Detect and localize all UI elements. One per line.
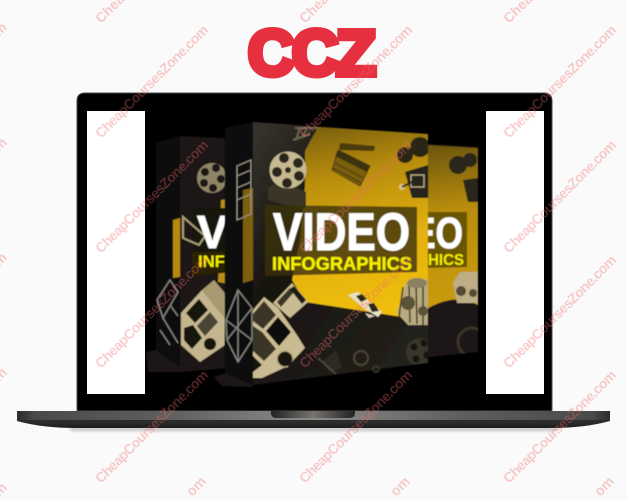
watermark: CheapCoursesZone.com (500, 367, 619, 486)
white screen panel left (87, 111, 145, 394)
product box: back left: V (197, 206, 228, 258)
trackpad notch (271, 411, 355, 418)
laptop base (17, 411, 610, 431)
product box: back right: HICS (428, 252, 464, 269)
product box: back left (146, 136, 262, 372)
film strip top (293, 128, 318, 140)
watermark: CheapCoursesZone.com (500, 252, 619, 371)
watermark: CheapCoursesZone.com (92, 22, 211, 141)
logo: CCZ: C (248, 17, 294, 89)
watermark: CheapCoursesZone.com (296, 252, 415, 371)
product box: back right (427, 143, 479, 358)
white screen panel right (486, 111, 544, 394)
box front face (253, 122, 428, 385)
icon: film projector (397, 137, 430, 198)
icon: reel bottom right (406, 338, 428, 365)
logo: CCZ: C (292, 17, 338, 89)
watermark: CheapCoursesZone.com (92, 367, 211, 486)
title: VIDEO: VIDEO (273, 203, 410, 262)
side lattice (157, 280, 178, 345)
subtitle: INFOGRAPHICS: INFOGRAPHICS (272, 254, 412, 274)
watermark: CheapCoursesZone.com (296, 22, 415, 141)
icon: clapperboard (332, 143, 375, 186)
watermark: CheapCoursesZone.com (92, 252, 211, 371)
product box: main (214, 122, 434, 387)
side clapper (237, 160, 251, 220)
icon: reel (456, 326, 478, 354)
product box: back right: EO (412, 209, 463, 258)
laptop lid (77, 93, 552, 411)
title band (265, 205, 417, 276)
watermark: CheapCoursesZone.com (296, 137, 415, 256)
watermark: om (387, 473, 413, 499)
watermark: CheapCoursesZone.com (92, 137, 211, 256)
logo: CCZ (248, 17, 376, 89)
icon: film scraps on dark area (318, 350, 379, 374)
popcorn (453, 272, 478, 303)
watermark: CheapCoursesZone.com (296, 367, 415, 486)
watermark: om (591, 473, 617, 499)
box side face (214, 122, 253, 387)
icon: film reel (268, 152, 306, 208)
watermark: CheapCoursesZone.com (500, 22, 619, 141)
logo: CCZ: Z (336, 17, 376, 89)
product box: back left: INF (198, 252, 225, 271)
watermark: CheapCoursesZone.com (500, 137, 619, 256)
icon: vintage camera (252, 282, 309, 379)
icon: ticket (348, 292, 382, 318)
watermark: om (183, 473, 209, 499)
film strip (183, 217, 205, 245)
icon: popcorn (397, 278, 428, 325)
camera lattice (181, 280, 235, 362)
icon: film reel (197, 163, 227, 193)
yellow area (292, 127, 428, 321)
